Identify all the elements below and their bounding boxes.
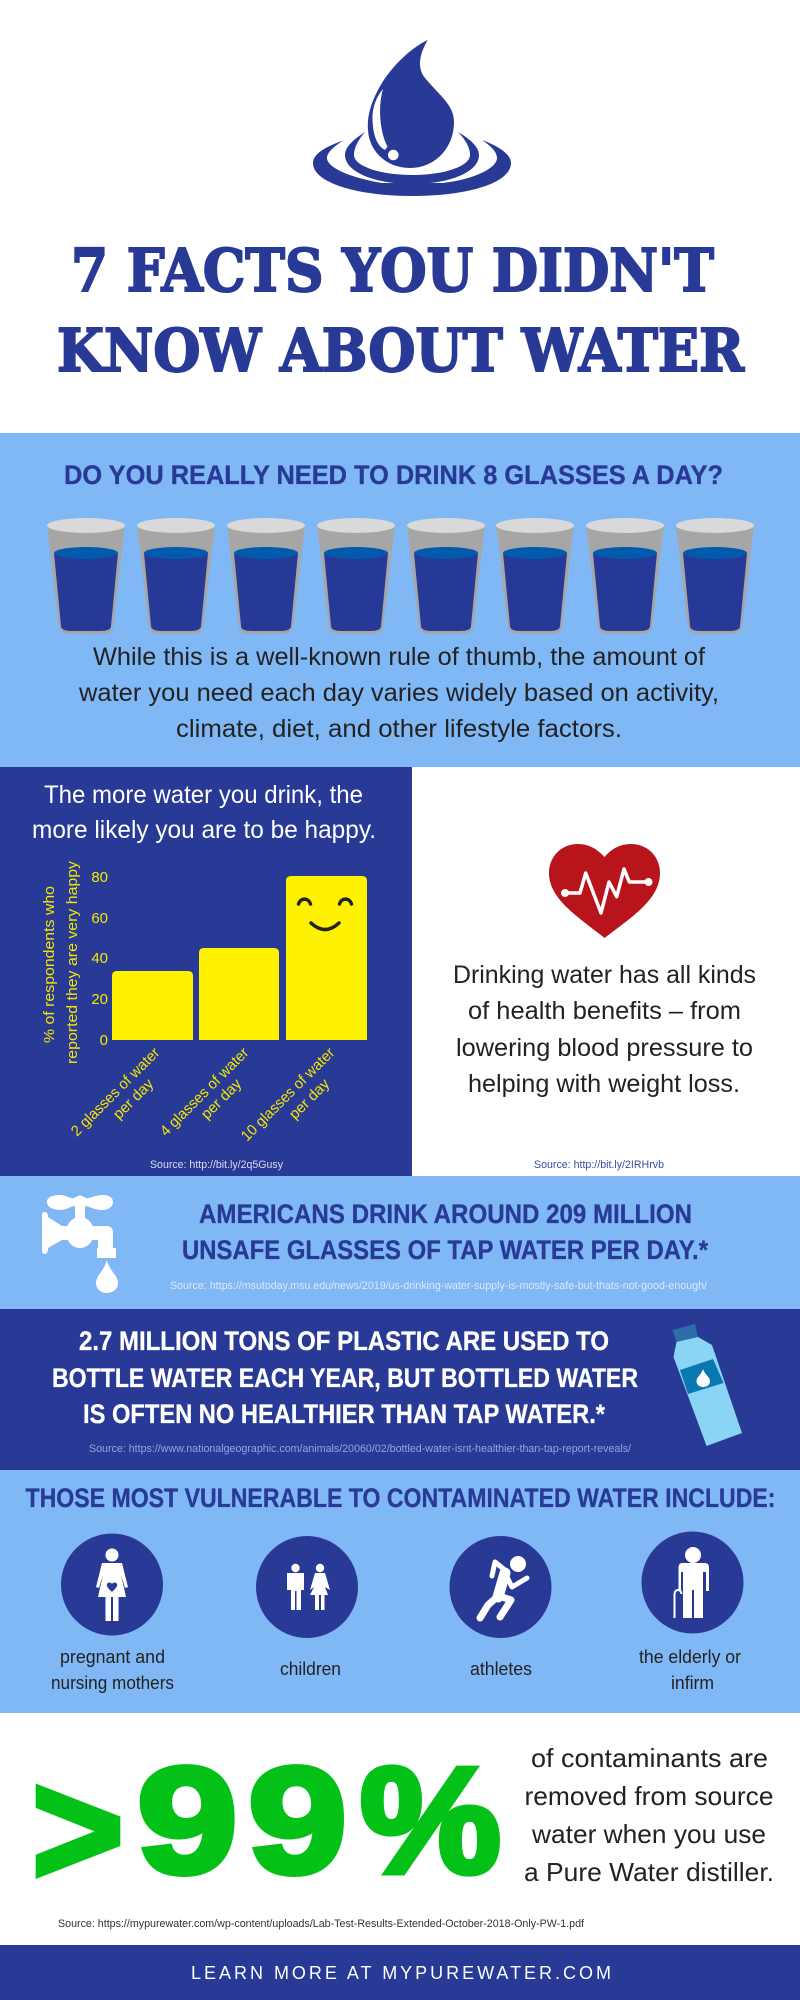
icon: elderly person with cane — [642, 1532, 744, 1634]
label: pregnant and nursing mothers: pregnant and — [60, 1646, 165, 1667]
icon: pregnant woman — [61, 1534, 163, 1636]
heading: unsafe tap water: UNSAFE GLASSES OF TAP WATER PER DAY.* — [182, 1235, 709, 1265]
panel: header — [0, 0, 800, 433]
heading: eight glasses question: DO YOU REALLY NEED TO DRINK 8 GLASSES A DAY? — [64, 460, 723, 490]
x axis labels: per day — [286, 1075, 334, 1123]
icon: smiley face on tallest bar — [298, 899, 352, 930]
panel: happiness chart — [0, 767, 412, 1176]
y axis title — [41, 860, 81, 1064]
panel: vulnerable groups — [0, 1470, 800, 1713]
label: children: children — [280, 1658, 341, 1679]
panel: bottled water — [0, 1309, 800, 1470]
heading: unsafe tap water: AMERICANS DRINK AROUND 209 MILLION — [199, 1199, 692, 1229]
title: KNOW ABOUT WATER — [57, 316, 745, 385]
heading: plastic bottles — [52, 1326, 638, 1429]
heading: plastic bottles: IS OFTEN NO HEALTHIER THAN TAP WATER.* — [83, 1399, 606, 1429]
y axis ticks: 20 — [91, 991, 108, 1008]
text block: health benefits — [453, 961, 756, 1098]
source: health: Source: http://bit.ly/2IRHrvb — [534, 1159, 664, 1171]
text block: contaminants removed — [524, 1743, 774, 1887]
icon: children — [256, 1536, 358, 1638]
big number: greater than 99 percent: % — [360, 1736, 501, 1905]
icon: heart with pulse — [549, 844, 660, 938]
text block: health benefits: of health benefits – from — [468, 997, 741, 1025]
icon: water bottle — [672, 1324, 742, 1446]
y axis ticks: 0 — [100, 1032, 108, 1049]
text block: contaminants removed: water when you use — [531, 1819, 766, 1849]
x axis labels: per day — [198, 1075, 246, 1123]
text block: contaminants removed: a Pure Water distiller. — [524, 1857, 774, 1887]
label: athletes: athletes — [470, 1658, 532, 1679]
icon: athlete running — [450, 1536, 552, 1638]
x axis labels — [68, 1044, 338, 1145]
heading: happiness — [32, 781, 376, 844]
title: 7 FACTS YOU DIDN'T — [71, 236, 714, 305]
panel: health benefits — [412, 767, 800, 1176]
y axis title: % of respondents who — [41, 886, 58, 1043]
text block: rule of thumb: climate, diet, and other lifestyle factors. — [176, 715, 622, 743]
text block: rule of thumb: water you need each day varies widely based on activity, — [78, 679, 719, 707]
text block: health benefits: helping with weight loss. — [468, 1070, 740, 1098]
heading: plastic bottles: BOTTLE WATER EACH YEAR, BUT BOTTLED WATER — [52, 1363, 638, 1393]
big number: greater than 99 percent — [32, 1735, 501, 1919]
panel: tap water — [0, 1176, 800, 1309]
big number: greater than 99 percent: 9 — [137, 1737, 238, 1905]
source: happiness: Source: http://bit.ly/2q5Gusy — [150, 1159, 283, 1171]
icon: tap with drop — [42, 1195, 118, 1293]
label: the elderly or infirm: infirm — [671, 1672, 714, 1693]
y axis ticks: 80 — [91, 869, 108, 886]
source: bottled water: Source: https://www.nationalgeographic.com/animals/20060/02/bottled-water-isnt-healthier-than-tap-report-reveals/ — [89, 1443, 632, 1455]
call to action: LEARN MORE AT MYPUREWATER.COM — [191, 1963, 611, 1983]
x axis labels: 10 glasses of water — [238, 1044, 338, 1145]
x axis labels: 4 glasses of water — [157, 1044, 252, 1140]
source: tap water: Source: https://msutoday.msu.edu/news/2019/us-drinking-water-supply-is-mostly-safe-but-thats-not-good-enough/ — [170, 1280, 708, 1292]
icon: water drop with ripples — [313, 40, 511, 196]
text block: health benefits: Drinking water has all kinds — [453, 961, 756, 989]
icon: row of eight water glasses — [47, 518, 754, 634]
panel: distiller statistic — [0, 1713, 800, 1945]
label: pregnant and nursing mothers: nursing mothers — [51, 1672, 174, 1693]
text block: rule of thumb: While this is a well-known rule of thumb, the amount of — [93, 643, 705, 671]
big number: greater than 99 percent: 9 — [248, 1735, 347, 1905]
panel: eight glasses — [0, 433, 800, 767]
heading: unsafe tap water — [182, 1199, 709, 1265]
bars — [112, 876, 367, 1040]
heading: happiness: The more water you drink, the — [44, 781, 363, 809]
y axis title: reported they are very happy — [64, 860, 81, 1064]
x axis labels: 2 glasses of water — [68, 1044, 163, 1140]
y axis ticks: 40 — [91, 950, 108, 967]
text block: contaminants removed: removed from source — [524, 1781, 774, 1811]
heading: plastic bottles: 2.7 MILLION TONS OF PLASTIC ARE USED TO — [79, 1326, 609, 1356]
heading: happiness: more likely you are to be happy. — [32, 816, 376, 844]
label: the elderly or infirm — [639, 1646, 741, 1693]
text block: health benefits: lowering blood pressure to — [456, 1034, 753, 1062]
x axis labels: per day — [110, 1075, 158, 1123]
text block: rule of thumb — [78, 643, 719, 743]
label: pregnant and nursing mothers — [51, 1646, 174, 1693]
text block: contaminants removed: of contaminants are — [531, 1743, 768, 1773]
y axis ticks — [91, 869, 108, 1049]
y axis ticks: 60 — [91, 910, 108, 927]
footer — [0, 1945, 800, 2000]
big number: greater than 99 percent: > — [32, 1739, 124, 1919]
source: lab test results: Source: https://mypurewater.com/wp-content/uploads/Lab-Test-Results-Extended-October-2018-Only-PW-1.pdf — [58, 1918, 585, 1930]
bar chart — [41, 860, 367, 1145]
title — [57, 236, 745, 385]
label: the elderly or infirm: the elderly or — [639, 1646, 741, 1667]
